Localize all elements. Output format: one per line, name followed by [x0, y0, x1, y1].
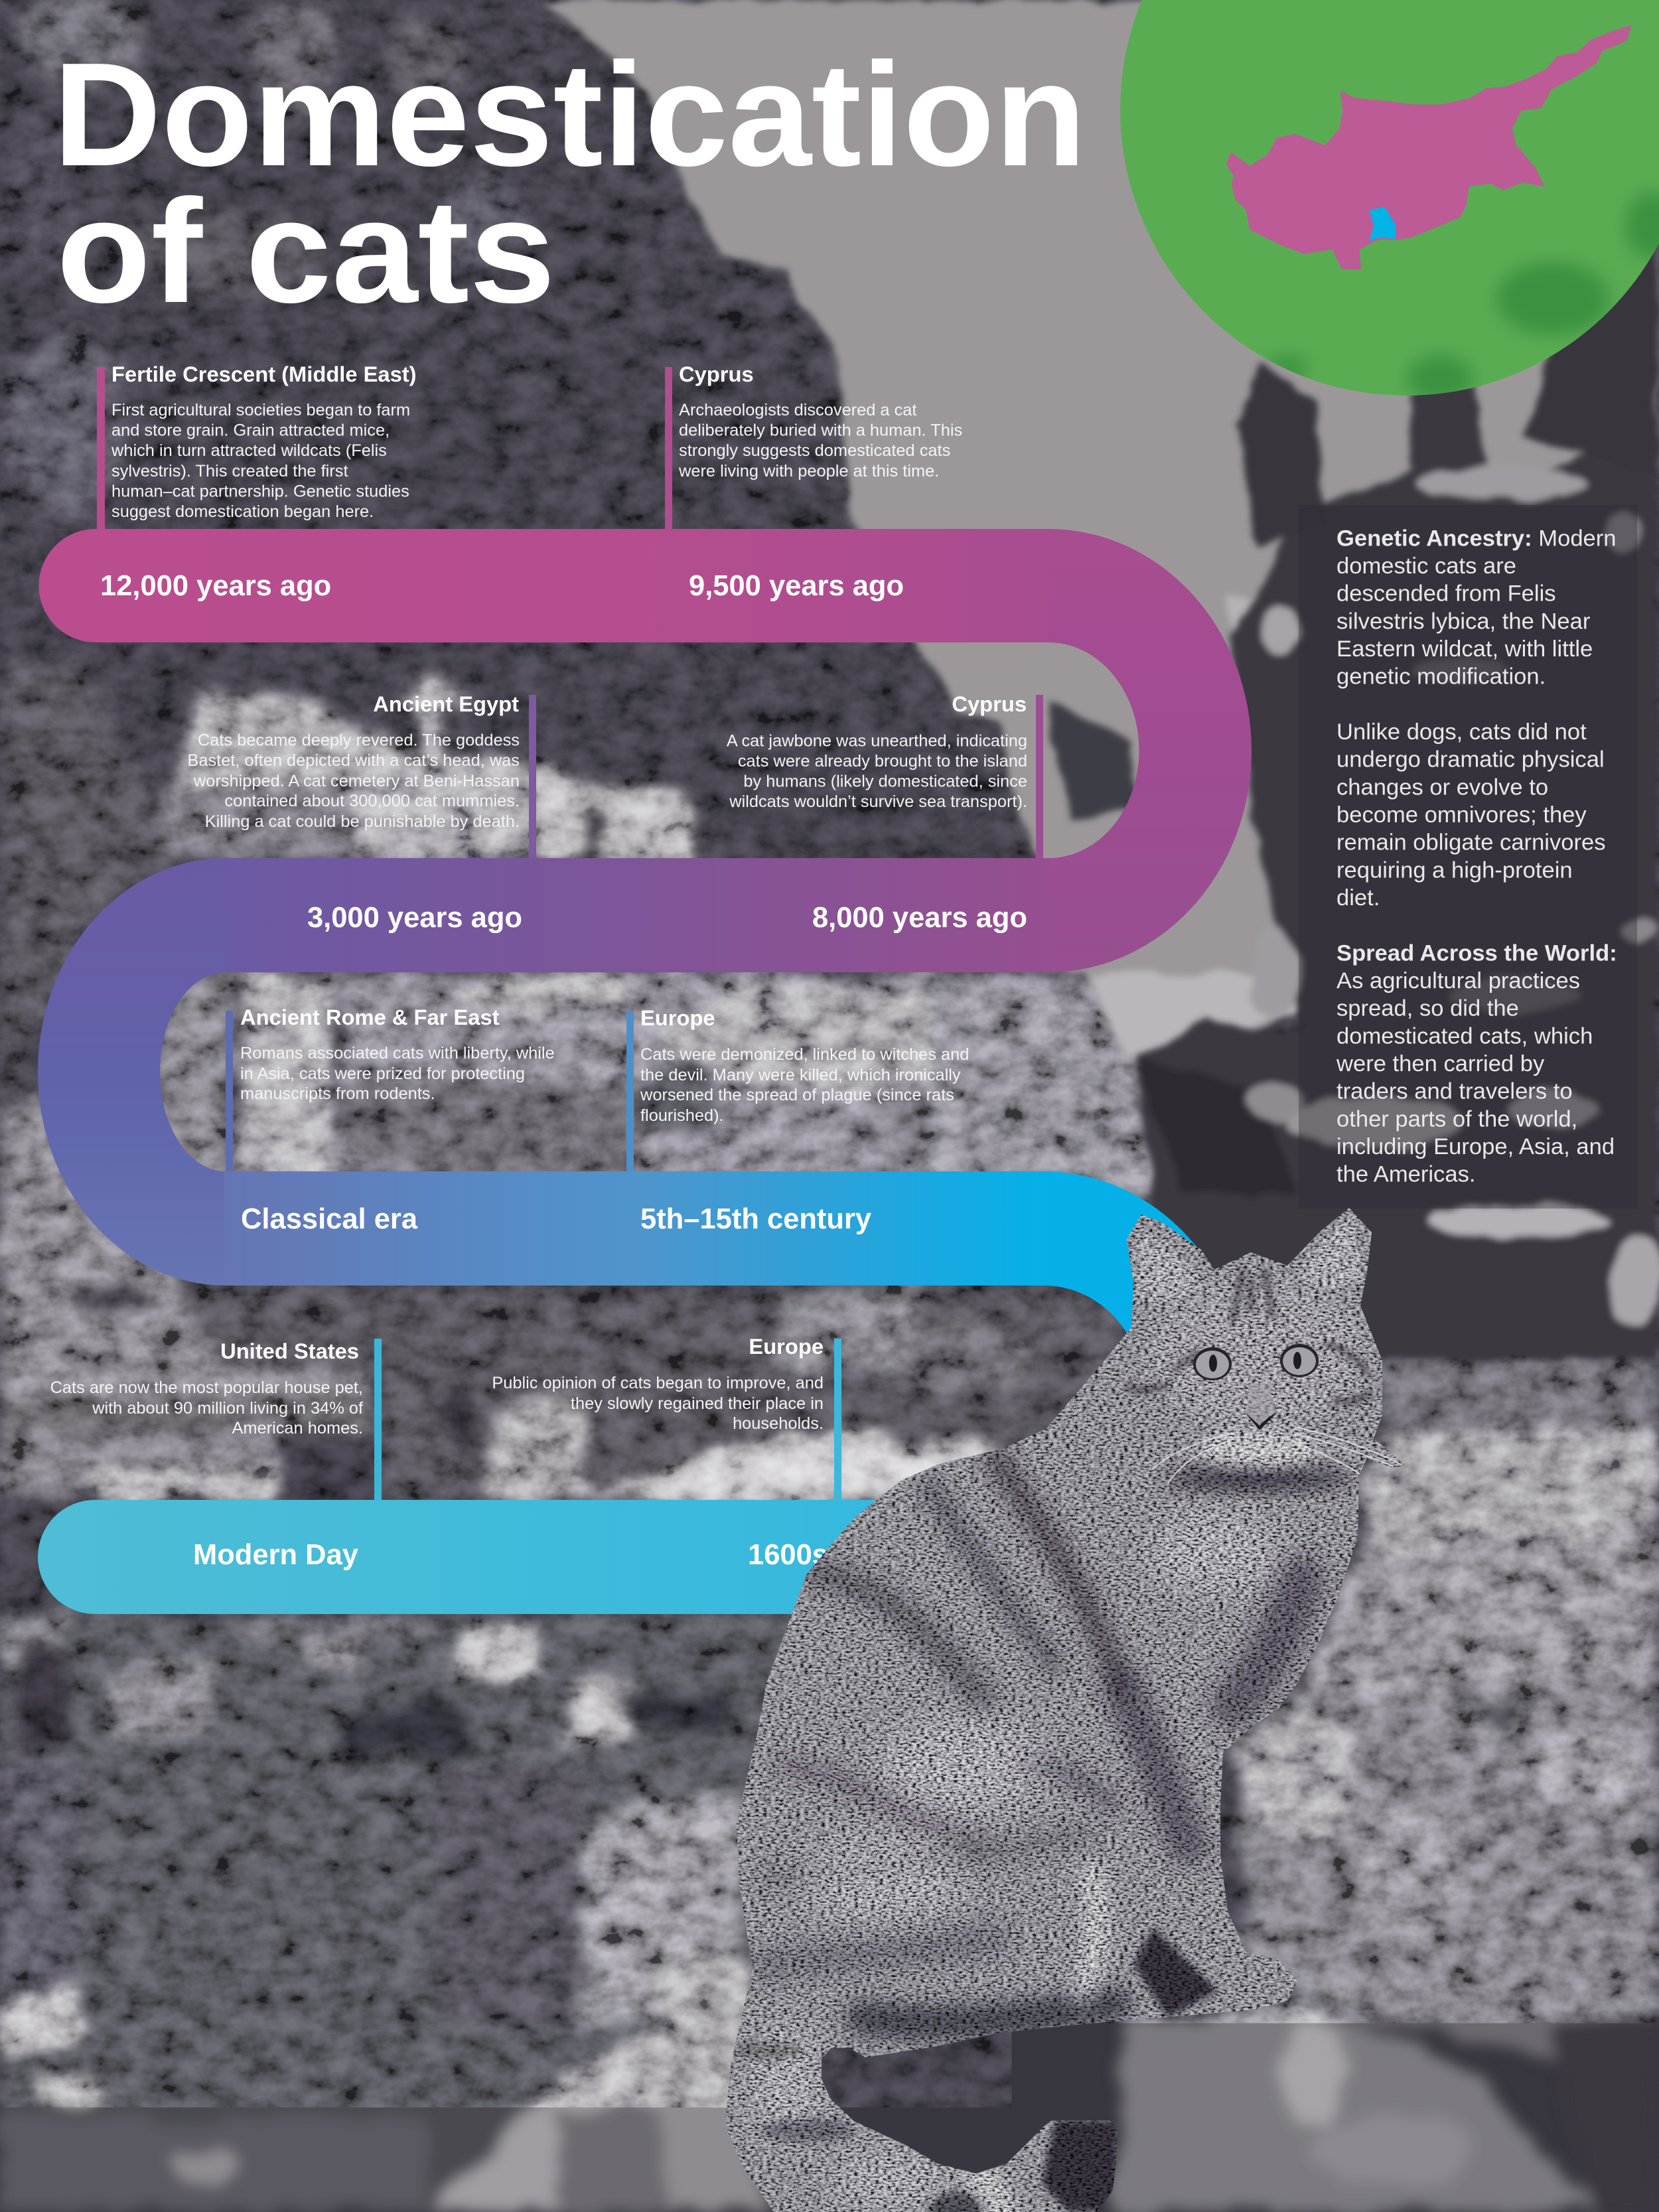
title: of cats	[56, 169, 555, 334]
pie labels: Only 10%	[181, 1818, 250, 1835]
cat head shading	[1138, 1215, 1367, 1492]
fur texture overlay	[697, 1181, 1427, 2212]
text block: genetic ancestry and spread: silvestris lybica, the Near	[1336, 609, 1590, 634]
text block: genetic ancestry and spread: domestic cats are	[1336, 553, 1516, 579]
right side boulders	[1194, 1301, 1659, 1434]
timeline: Europe, 1600s: households.	[733, 1414, 824, 1433]
timeline: Ancient Egypt, 3,000 years ago: 3,000 years ago	[307, 902, 522, 934]
timeline: Ancient Egypt, 3,000 years ago: worshipped. A cat cemetery at Beni-Hassan	[193, 772, 520, 790]
text block: genetic ancestry and spread: become omnivores; they	[1336, 802, 1587, 828]
timeline: Europe, 5th–15th century: flourished).	[640, 1106, 724, 1125]
timeline: Cyprus, 9,500 years ago	[678, 362, 962, 602]
timeline: Cyprus, 8,000 years ago: by humans (likely domesticated, since	[743, 773, 1027, 791]
illustration: wildcat sitting on rock	[697, 1181, 1427, 2212]
timeline: Ancient Egypt, 3,000 years ago: Killing a cat could be punishable by death.	[205, 812, 520, 831]
text block: genetic ancestry and spread: diet.	[1336, 885, 1380, 911]
text block: genetic ancestry and spread: the Americas.	[1336, 1162, 1475, 1187]
text block: genetic ancestry and spread: were then carried by	[1336, 1051, 1545, 1076]
cat eyes	[1193, 1344, 1319, 1380]
connector bars above the ribbon	[97, 367, 1043, 1501]
text block: genetic ancestry and spread: requiring a high-protein	[1336, 857, 1573, 883]
map: Cyprus outline	[1226, 25, 1632, 269]
timeline: Ancient Egypt, 3,000 years ago: Cats became deeply revered. The goddess	[198, 731, 520, 750]
timeline: Cyprus, 9,500 years ago: 9,500 years ago	[689, 570, 904, 602]
timeline: Europe, 1600s	[492, 1334, 828, 1571]
text block: genetic ancestry and spread: genetic modification.	[1336, 664, 1546, 690]
timeline: Europe, 5th–15th century	[640, 1005, 969, 1235]
text block: genetic ancestry and spread: domesticated cats, which	[1336, 1023, 1593, 1049]
timeline: Ancient Rome and Far East, Classical era: in Asia, cats were prized for protecting	[240, 1065, 525, 1083]
timeline: Cyprus, 9,500 years ago: strongly suggests domesticated cats	[679, 441, 950, 460]
pie chart: indoor vs outdoor cats	[20, 1698, 490, 2114]
text block: genetic ancestry and spread: Spread Across the World:	[1336, 940, 1617, 966]
timeline: Cyprus, 9,500 years ago: Archaeologists discovered a cat	[679, 401, 916, 419]
timeline: Ancient Rome and Far East, Classical era	[240, 1005, 555, 1235]
timeline: Ancient Egypt, 3,000 years ago	[187, 692, 522, 934]
timeline: Fertile Crescent, 12,000 years ago: which in turn attracted wildcats (Felis	[111, 441, 387, 460]
timeline: United States, Modern Day: United States	[220, 1339, 359, 1363]
slice: indoor only 60%	[149, 1751, 436, 2114]
cat face markings	[1128, 1271, 1370, 1402]
timeline: Fertile Crescent, 12,000 years ago: sylvestris). This created the first	[111, 462, 348, 480]
timeline: Ancient Egypt, 3,000 years ago: Ancient Egypt	[373, 692, 519, 716]
timeline: Europe, 1600s: Europe	[749, 1334, 824, 1359]
timeline: Fertile Crescent, 12,000 years ago: Fertile Crescent (Middle East)	[111, 362, 417, 386]
timeline: Fertile Crescent, 12,000 years ago: suggest domestication began here.	[111, 502, 374, 521]
cat tail dark tip and bands	[737, 1928, 1218, 2212]
text block: genetic ancestry and spread: spread, so did the	[1336, 996, 1519, 1021]
pie labels: 60%	[322, 1955, 352, 1972]
timeline: Cyprus, 8,000 years ago: 8,000 years ago	[812, 902, 1027, 934]
pie labels: and Indoor	[125, 1928, 204, 1945]
cat whiskers	[1151, 1427, 1402, 1483]
timeline: Ancient Rome and Far East, Classical era: Ancient Rome & Far East	[240, 1005, 500, 1029]
slope below the ribbon	[0, 1088, 259, 1371]
timeline: United States, Modern Day: Cats are now the most popular house pet,	[50, 1378, 363, 1397]
text block: genetic ancestry and spread: Eastern wildcat, with little	[1336, 636, 1593, 662]
timeline: Europe, 5th–15th century: 5th–15th century	[640, 1203, 871, 1235]
timeline: Europe, 1600s: they slowly regained their place in	[571, 1394, 824, 1413]
timeline: Fertile Crescent, 12,000 years ago: and store grain. Grain attracted mice,	[111, 421, 390, 440]
timeline: Cyprus, 8,000 years ago: A cat jawbone was unearthed, indicating	[727, 731, 1027, 750]
text block: genetic ancestry and spread: undergo dramatic physical	[1336, 747, 1605, 773]
pie labels	[125, 1799, 380, 1972]
rocks below the ribbon	[0, 1614, 796, 2212]
winding timeline ribbon	[38, 529, 1252, 1614]
timeline: Cyprus, 8,000 years ago: Cyprus	[952, 692, 1027, 716]
sky	[540, 0, 1659, 1062]
timeline: Cyprus, 8,000 years ago: cats were already brought to the island	[738, 752, 1027, 771]
timeline: Fertile Crescent, 12,000 years ago	[100, 362, 417, 602]
pine trees	[1136, 425, 1659, 1361]
text block: genetic ancestry and spread: traders and travelers to	[1336, 1079, 1573, 1104]
timeline: Ancient Egypt, 3,000 years ago: Bastet, often depicted with a cat’s head, was	[187, 751, 520, 770]
timeline: Fertile Crescent, 12,000 years ago: First agricultural societies began to farm	[111, 401, 410, 419]
timeline: Cyprus, 9,500 years ago: deliberately buried with a human. This	[679, 421, 962, 440]
title: Domestication	[53, 33, 1086, 197]
map: highlighted excavation region	[1370, 207, 1396, 241]
timeline: Ancient Rome and Far East, Classical era: manuscripts from rodents.	[240, 1084, 435, 1103]
curved chart title: Indoor vs. Outdoor cats in the United States	[20, 1698, 490, 1970]
timeline: Europe, 5th–15th century: Europe	[640, 1005, 715, 1030]
timeline: Europe, 5th–15th century: the devil. Many were killed, which ironically	[640, 1066, 961, 1084]
pie labels: 30%	[149, 1946, 180, 1963]
timeline: Cyprus, 8,000 years ago	[727, 692, 1027, 934]
timeline: United States, Modern Day: with about 90 million living in 34% of	[92, 1399, 364, 1418]
text block: genetic ancestry and spread: other parts of the world,	[1336, 1106, 1577, 1132]
timeline: Cyprus, 9,500 years ago: were living with people at this time.	[678, 462, 939, 480]
timeline: Europe, 5th–15th century: worsened the spread of plague (since rats	[640, 1086, 954, 1104]
timeline: United States, Modern Day: Modern Day	[193, 1539, 358, 1571]
pie labels: Outdoor	[186, 1799, 246, 1816]
title	[53, 33, 1086, 334]
timeline: Cyprus, 8,000 years ago: wildcats wouldn’t survive sea transport).	[729, 792, 1027, 811]
timeline: Europe, 1600s: 1600s	[748, 1539, 828, 1571]
text block: genetic ancestry and spread: descended from Felis	[1336, 581, 1556, 607]
text block: genetic ancestry and spread: changes or evolve to	[1336, 774, 1548, 800]
timeline: Ancient Rome and Far East, Classical era: Classical era	[241, 1203, 418, 1235]
map: green circle with Cyprus island	[1120, 0, 1659, 402]
text block: genetic ancestry and spread: Unlike dogs, cats did not	[1336, 719, 1587, 745]
translucent panel behind genetics text	[1299, 505, 1637, 1209]
timeline: Cyprus, 9,500 years ago: Cyprus	[679, 362, 754, 386]
cat nose	[1244, 1384, 1277, 1430]
timeline: Fertile Crescent, 12,000 years ago: 12,000 years ago	[100, 570, 331, 602]
text block: genetic ancestry and spread	[1336, 526, 1617, 1187]
timeline: Ancient Egypt, 3,000 years ago: contained about 300,000 cat mummies.	[224, 792, 520, 810]
text block: genetic ancestry and spread: including Europe, Asia, and	[1336, 1134, 1615, 1159]
timeline: United States, Modern Day: American homes.	[232, 1419, 363, 1438]
timeline: Ancient Rome and Far East, Classical era: Romans associated cats with liberty, while	[240, 1044, 555, 1063]
slice: outdoor only 10%	[149, 1751, 255, 1933]
timeline: Europe, 1600s: Public opinion of cats began to improve, and	[492, 1374, 824, 1392]
text block: genetic ancestry and spread: As agricultural practices	[1336, 968, 1580, 994]
inner loop: wood and rocks	[156, 972, 1194, 1181]
pie labels: Indoor Only	[294, 1938, 380, 1955]
slice: outdoor and indoor 30%	[74, 1786, 255, 2079]
timeline: Europe, 5th–15th century: Cats were demonized, linked to witches and	[640, 1045, 969, 1064]
timeline: United States, Modern Day	[50, 1339, 364, 1571]
timeline: Fertile Crescent, 12,000 years ago: human–cat partnership. Genetic studies	[111, 482, 409, 500]
text block: genetic ancestry and spread: remain obligate carnivores	[1336, 830, 1606, 855]
pie labels: Outdoor	[135, 1909, 194, 1927]
text block: genetic ancestry and spread: Genetic Ancestry: Modern	[1336, 526, 1617, 551]
chapel	[166, 684, 697, 859]
dark mountain streaks	[20, 0, 139, 86]
